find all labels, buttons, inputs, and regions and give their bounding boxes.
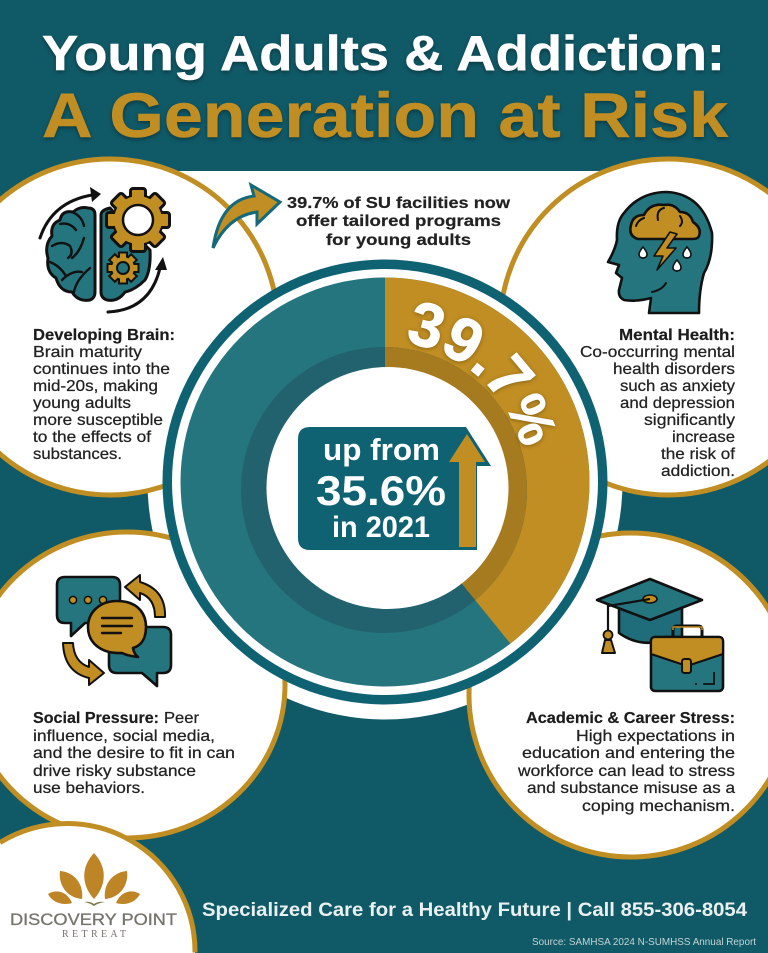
text: mental health — [580, 327, 736, 480]
title: A Generation at Risk — [42, 81, 729, 151]
text: mental health: increase — [672, 429, 735, 446]
icon: graduation cap and briefcase — [597, 579, 723, 691]
panel: academic and career stress — [469, 533, 768, 857]
text: social pressure: use behaviors. — [33, 780, 145, 797]
arrow: gold up arrow — [449, 434, 485, 547]
center callout text — [316, 432, 446, 544]
text: social pressure: Peer — [164, 710, 200, 727]
callout: facilities statistic: 39.7% of SU facilities now — [287, 195, 511, 212]
text: developing brain: Developing Brain: — [33, 327, 175, 344]
text: social pressure: Social Pressure: — [33, 710, 159, 727]
panel: mental health — [500, 159, 768, 495]
text: developing brain: mid-20s, making — [33, 378, 158, 395]
text: academic and career stress: and substance misuse as a — [527, 780, 735, 797]
panel: social pressure — [0, 532, 285, 838]
text: developing brain: continues into the — [33, 361, 170, 378]
center callout text: in 2021 — [332, 511, 430, 544]
text: developing brain: more susceptible — [33, 412, 163, 429]
text: developing brain — [33, 327, 175, 463]
icon: head with storm cloud — [608, 192, 712, 313]
callout: facilities statistic: for young adults — [326, 232, 471, 249]
text: academic and career stress: coping mechanism. — [582, 798, 735, 815]
text: social pressure — [33, 710, 235, 797]
logo wordmark: DISCOVERY POINT — [10, 910, 177, 929]
donut label: 39.7%: 39.7% — [406, 302, 556, 448]
logo wordmark: RETREAT — [62, 929, 126, 940]
text: academic and career stress — [517, 710, 735, 815]
text: mental health: and depression — [620, 395, 735, 412]
logo wordmark — [10, 910, 177, 940]
text: developing brain: young adults — [33, 395, 131, 412]
donut outer ring — [162, 260, 608, 704]
callout: facilities statistic — [287, 195, 511, 249]
center callout: up from 35.6% — [298, 427, 491, 550]
icon: chat bubbles — [57, 575, 171, 686]
text: mental health: health disorders — [613, 361, 735, 378]
footer call to action: Specialized Care for a Healthy Future | Call 855-306-8054 — [202, 900, 747, 921]
center callout text: up from — [323, 432, 440, 467]
icon: brain with gears — [40, 187, 169, 312]
text: developing brain: to the effects of — [33, 429, 152, 446]
text: developing brain: substances. — [33, 446, 122, 463]
panel: logo — [0, 824, 195, 953]
text: mental health: the risk of — [661, 446, 736, 463]
donut chart — [180, 278, 590, 686]
text: academic and career stress: Academic & Career Stress: — [526, 710, 735, 727]
text: social pressure: drive risky substance — [33, 763, 196, 780]
panel: developing brain — [0, 159, 278, 495]
text: mental health: significantly — [644, 412, 735, 429]
white backing panel — [170, 171, 600, 401]
text: mental health: addiction. — [661, 463, 735, 480]
text: academic and career stress: High expectations in — [576, 728, 735, 745]
icon: lotus logo — [48, 853, 140, 906]
text: academic and career stress: workforce can lead to stress — [517, 763, 735, 780]
title: Young Adults & Addiction: — [42, 27, 725, 81]
text: mental health: Mental Health: — [619, 327, 735, 344]
source note: Source: SAMHSA 2024 N-SUMHSS Annual Report — [532, 936, 756, 948]
center callout text: 35.6% — [316, 467, 446, 514]
text: academic and career stress: education and entering the — [522, 745, 735, 762]
text: social pressure: and the desire to fit in can — [33, 745, 235, 762]
text: developing brain: Brain maturity — [33, 344, 142, 361]
arrow: curved callout arrow — [213, 185, 280, 248]
title — [42, 27, 729, 151]
callout: facilities statistic: offer tailored programs — [296, 213, 501, 230]
text: social pressure: influence, social media, — [33, 728, 215, 745]
text: mental health: Co-occurring mental — [580, 344, 735, 361]
white halo behind donut — [148, 244, 622, 720]
text: mental health: such as anxiety — [620, 378, 735, 395]
